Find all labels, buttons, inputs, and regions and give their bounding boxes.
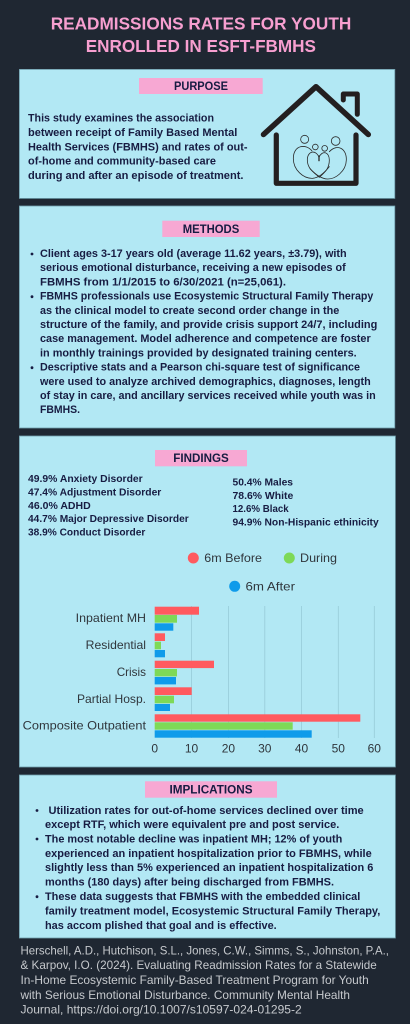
text block: methods bullets: in monthly trainings provided by designated training centers. [40, 347, 357, 359]
chart legend [188, 551, 337, 593]
citation: Journal, https://doi.org/10.1007/s10597-024-01295-2 [20, 1003, 302, 1017]
heading: implications: IMPLICATIONS [170, 784, 253, 796]
text block: methods bullets: structure of the family, and provide crisis support 24/7, including [40, 319, 377, 331]
title: ENROLLED IN ESFT-FBMHS [86, 36, 316, 56]
heading: implications [145, 781, 277, 798]
chart legend: 6m After [246, 579, 295, 593]
citation: & Karpov, I.O. (2024). Evaluating Readmission Rates for a Statewide [20, 958, 377, 972]
text block: purpose statement: between receipt of Family Based Mental [28, 127, 237, 139]
text block: methods bullets: Descriptive stats and a Pearson chi-square test of significance [40, 362, 360, 374]
chart axis labels: 10 [185, 742, 198, 756]
text block: implications bullets: Utilization rates for out-of-home services declined over time [48, 805, 364, 817]
heading: findings: FINDINGS [173, 453, 229, 465]
text block: purpose statement: of-home and community-based care [28, 156, 216, 168]
bars: residential [155, 633, 165, 657]
text block: methods bullets: of stay in care, and ancillary services received while youth was in [40, 390, 376, 402]
bar chart: service use before, during and after [23, 606, 381, 756]
text block: implications bullets: has accom plished that goal and is effective. [45, 920, 277, 932]
chart axis labels [151, 742, 381, 756]
text block: implications bullets: except RTF, which were equivalent pre and post service. [45, 819, 339, 831]
bars: composite outpatient [155, 714, 360, 738]
text block: implications bullets: slightly less than 5% experienced an inpatient hospitalization 6 [45, 862, 373, 874]
text block: diagnoses: 49.9% Anxiety Disorder [28, 473, 143, 485]
chart category labels: Composite Outpatient [23, 718, 147, 732]
text block: purpose statement: This study examines the association [28, 113, 214, 125]
panel: findings [19, 436, 395, 767]
text block: purpose statement: Health Services (FBMHS) and rates of out- [28, 141, 248, 153]
chart category labels [23, 611, 147, 732]
text block: demographics [232, 476, 379, 528]
chart legend: 6m Before [204, 551, 262, 565]
chart axis labels: 20 [222, 742, 235, 756]
bars: crisis [155, 661, 214, 684]
text block: demographics: 94.9% Non-Hispanic ethinicity [232, 516, 379, 528]
text block: demographics: 50.4% Males [232, 476, 293, 488]
text block: purpose statement [28, 113, 248, 182]
text block: methods bullets: serious emotional disturbance, receiving a new episodes of [40, 262, 346, 274]
text block: methods bullets [31, 248, 377, 416]
chart axis labels: 40 [295, 742, 308, 756]
text block: methods bullets: Client ages 3-17 years old (average 11.62 years, ±3.79), with [40, 248, 347, 260]
heading: purpose: PURPOSE [174, 81, 228, 93]
text block: methods bullets: FBMHS professionals use Ecosystemic Structural Family Therapy [40, 291, 374, 303]
citation [20, 943, 389, 1017]
chart axis labels: 50 [332, 742, 345, 756]
chart category labels: Partial Hosp. [77, 692, 146, 706]
icon: house with family [264, 87, 368, 183]
title: READMISSIONS RATES FOR YOUTH [51, 14, 351, 34]
chart category labels: Inpatient MH [76, 611, 146, 625]
text block: methods bullets: FBMHS from 1/1/2015 to 6/30/2021 (n=25,061). [40, 276, 286, 288]
chart category labels: Residential [86, 638, 146, 652]
heading: methods: METHODS [183, 224, 240, 236]
text block: implications bullets [36, 805, 380, 932]
bars: partial hospitalization [155, 687, 192, 711]
citation: with Serious Emotional Disturbance. Community Mental Health [20, 988, 350, 1002]
panel: purpose [19, 69, 395, 198]
text block: implications bullets: experienced an inpatient hospitalization prior to FBMHS, while [45, 848, 372, 860]
chart legend: During [300, 551, 337, 565]
bars: inpatient MH [155, 607, 199, 631]
text block: diagnoses: 38.9% Conduct Disorder [28, 527, 145, 539]
text block: diagnoses: 47.4% Adjustment Disorder [28, 487, 161, 499]
citation: Herschell, A.D., Hutchison, S.L., Jones, C.W., Simms, S., Johnston, P.A., [20, 943, 389, 957]
citation: In-Home Ecosystemic Family-Based Treatment Program for Youth [20, 973, 369, 987]
title [51, 14, 351, 56]
text block: methods bullets: as the clinical model to create second order change in the [40, 305, 339, 317]
text block: methods bullets: FBMHS. [40, 404, 80, 416]
chart category labels: Crisis [117, 665, 146, 679]
text block: implications bullets: family treatment model, Ecosystemic Structural Family Therapy, [45, 906, 380, 918]
heading: purpose [139, 78, 263, 94]
text block: diagnoses [28, 473, 189, 539]
text block: methods bullets: case management. Model adherence and competence are foster [40, 333, 371, 345]
text block: demographics: 12.6% Black [232, 503, 289, 515]
text block: implications bullets: months (180 days) after being discharged from FBMHS. [45, 876, 334, 888]
text block: diagnoses: 44.7% Major Depressive Disorder [28, 513, 189, 525]
text block: implications bullets: The most notable decline was inpatient MH; 12% of youth [45, 834, 343, 846]
chart axis labels: 60 [368, 742, 381, 756]
text block: demographics: 78.6% White [232, 490, 293, 502]
text block: implications bullets: These data suggests that FBMHS with the embedded clinical [45, 891, 360, 903]
text block: methods bullets: were used to analyze archived demographics, diagnoses, length [39, 376, 371, 388]
panel: implications [19, 775, 395, 938]
text block: diagnoses: 46.0% ADHD [28, 500, 91, 512]
panel: methods [19, 206, 395, 428]
chart axis labels: 0 [151, 742, 158, 756]
heading: methods [162, 221, 260, 237]
text block: purpose statement: during and after an episode of treatment. [28, 170, 244, 182]
chart axis labels: 30 [258, 742, 272, 756]
heading: findings [155, 450, 247, 466]
